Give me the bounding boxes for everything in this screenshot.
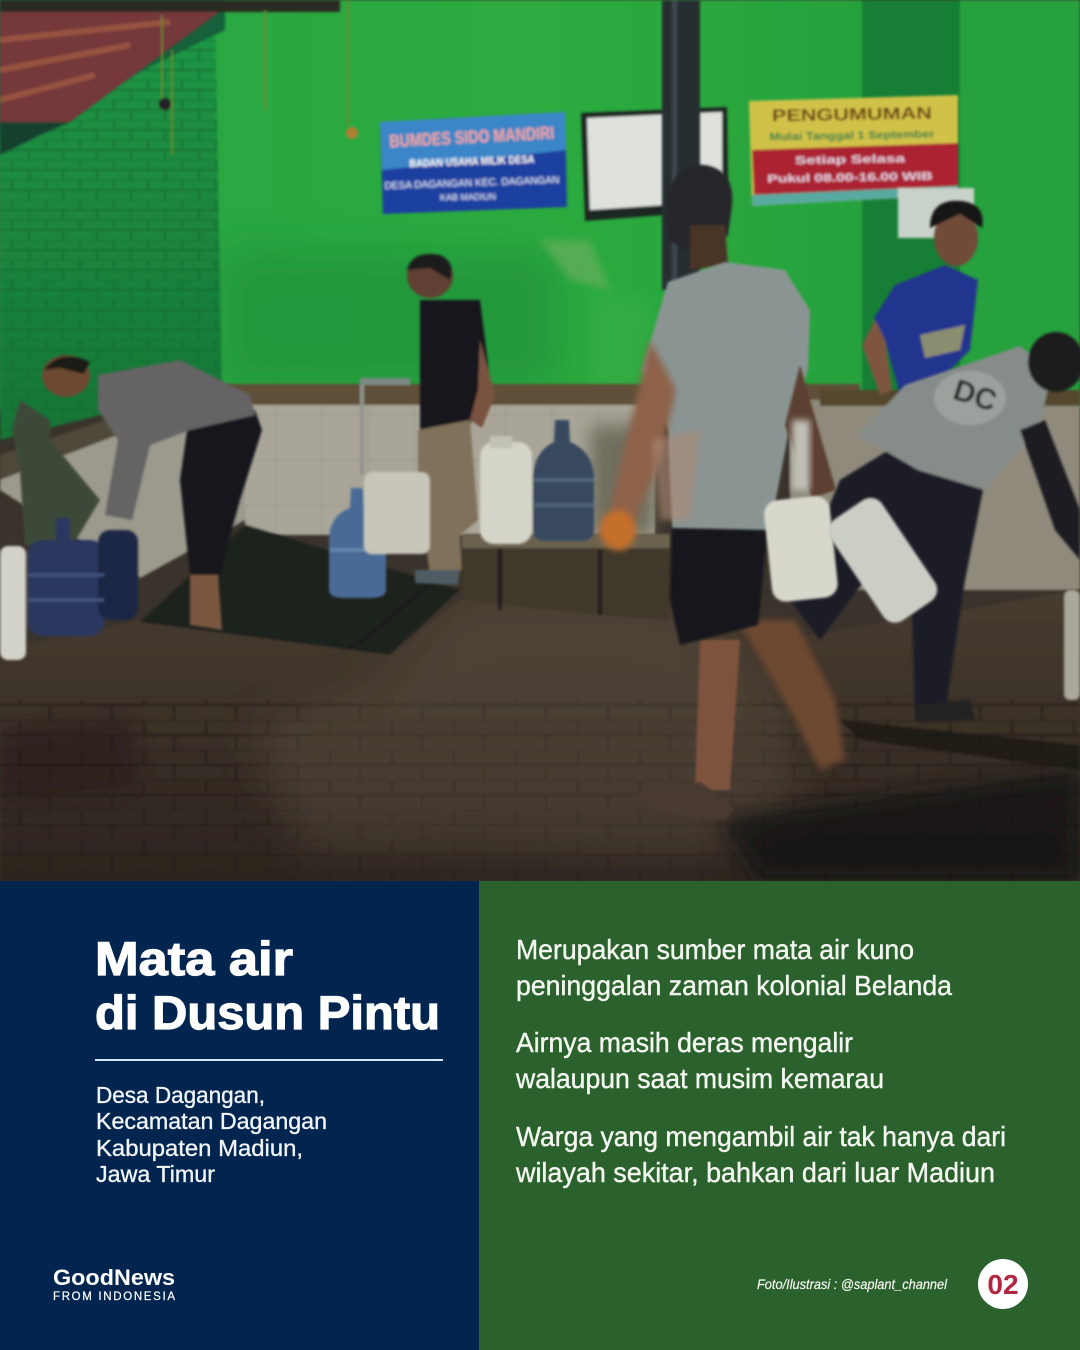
roof — [0, 0, 340, 155]
tiled trough — [0, 378, 1080, 590]
floor — [0, 525, 1080, 881]
water jugs and gallons — [0, 420, 1080, 700]
fact 2 — [515, 1027, 884, 1094]
logo: GoodNews from Indonesia — [53, 1265, 175, 1303]
banner: BUMDes Sido Mandiri: DESA DAGANGAN KEC. DAGANGAN — [384, 175, 560, 192]
banner: yellow and red notice — [749, 95, 974, 238]
iron pole — [662, 0, 700, 290]
brick wall on the left — [0, 0, 225, 440]
banner: BUMDes Sido Mandiri: BADAN USAHA MILIK DESA — [409, 154, 535, 170]
page number badge — [978, 1259, 1028, 1309]
banner: BUMDes Sido Mandiri: KAB MADIUN — [440, 192, 496, 202]
fact 3 — [515, 1121, 1006, 1188]
notice board — [581, 107, 728, 221]
fact 1: peninggalan zaman kolonial Belanda — [516, 970, 953, 1001]
location text: Kabupaten Madiun, — [96, 1135, 303, 1161]
boy in blue shirt — [862, 201, 983, 395]
person at the tap — [407, 254, 495, 585]
location text: Desa Dagangan, — [96, 1082, 265, 1108]
heading: di Dusun Pintu — [95, 986, 440, 1039]
banner: yellow and red notice: Pukul 08.00-16.00 WIB — [767, 171, 933, 185]
man bending with jerry cans: DC — [949, 374, 1001, 418]
fact 1 — [516, 934, 953, 1001]
heading — [95, 932, 440, 1039]
banner: BUMDes Sido Mandiri: BUMDES SIDO MANDIRI — [389, 123, 555, 151]
photo: villagers collecting spring water — [0, 0, 1080, 881]
banner: yellow and red notice: Setiap Selasa — [795, 153, 906, 167]
logo: GoodNews from Indonesia: FROM INDONESIA — [53, 1291, 175, 1303]
banner: BUMDes Sido Mandiri — [380, 112, 567, 214]
logo: GoodNews from Indonesia: GoodNews — [53, 1265, 175, 1290]
fact 3: wilayah sekitar, bahkan dari luar Madiun — [515, 1157, 995, 1188]
location text — [96, 1082, 327, 1187]
green wall — [0, 0, 1080, 410]
panel: title and location — [0, 881, 479, 1350]
photo credit: Foto/Ilustrasi : @saplant_channel — [757, 1277, 948, 1292]
hanging wires — [159, 0, 358, 155]
heading: Mata air — [95, 932, 293, 985]
page number badge: 02 — [987, 1269, 1019, 1300]
banner: yellow and red notice: Mulai Tanggal 1 September — [769, 129, 935, 143]
location text: Jawa Timur — [96, 1161, 215, 1187]
banner: yellow and red notice: PENGUMUMAN — [772, 104, 932, 125]
man bending with jerry cans — [790, 332, 1080, 722]
location text: Kecamatan Dagangan — [96, 1108, 327, 1134]
blurred man in grey t-shirt — [600, 165, 943, 820]
fact 2: walaupun saat musim kemarau — [515, 1063, 884, 1094]
panel: facts — [479, 881, 1080, 1350]
person bending at left — [12, 355, 262, 630]
fact 3: Warga yang mengambil air tak hanya dari — [516, 1121, 1006, 1152]
fact 2: Airnya masih deras mengalir — [516, 1027, 853, 1058]
fact 1: Merupakan sumber mata air kuno — [516, 934, 914, 965]
